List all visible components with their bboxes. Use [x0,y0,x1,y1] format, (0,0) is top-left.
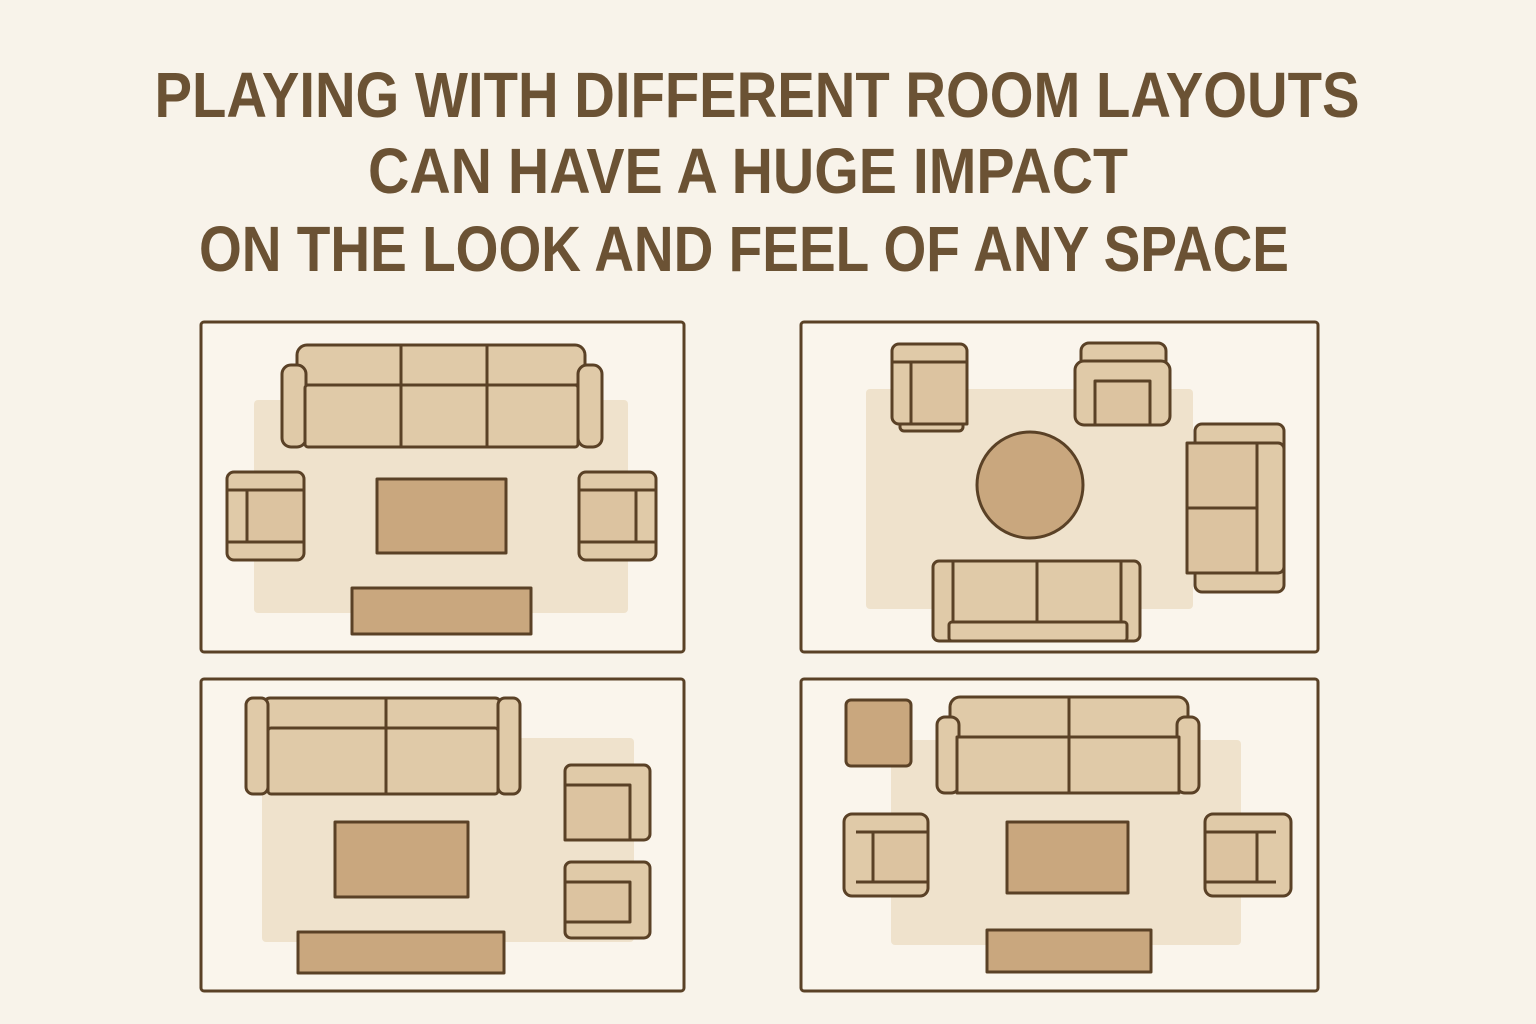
panel: layout 2 [801,322,1318,652]
armchair right [1205,814,1291,896]
coffee table [377,479,506,553]
title: ON THE LOOK AND FEEL OF ANY SPACE [199,213,1289,285]
coffee table [335,822,468,897]
sofa [246,698,520,794]
title [154,59,1360,285]
armchair 2 [1075,343,1170,425]
sofa right [1187,424,1284,592]
sofa [282,345,602,447]
sofa [937,697,1199,793]
coffee table [1007,822,1128,893]
tv stand [987,930,1151,972]
armchair 1 [892,344,967,431]
side table [846,700,911,766]
sofa bottom [933,561,1140,641]
round table [977,432,1083,538]
armchair left [844,814,928,896]
armchair bottom [565,862,650,938]
panel: layout 3 [201,679,684,991]
title: CAN HAVE A HUGE IMPACT [368,135,1128,207]
armchair right [579,472,656,560]
title: PLAYING WITH DIFFERENT ROOM LAYOUTS [154,59,1360,131]
armchair left [227,472,304,560]
armchair top [565,765,650,840]
tv stand [352,588,531,634]
panel: layout 1 [201,322,684,652]
tv stand [298,932,504,973]
panel: layout 4 [801,679,1318,991]
